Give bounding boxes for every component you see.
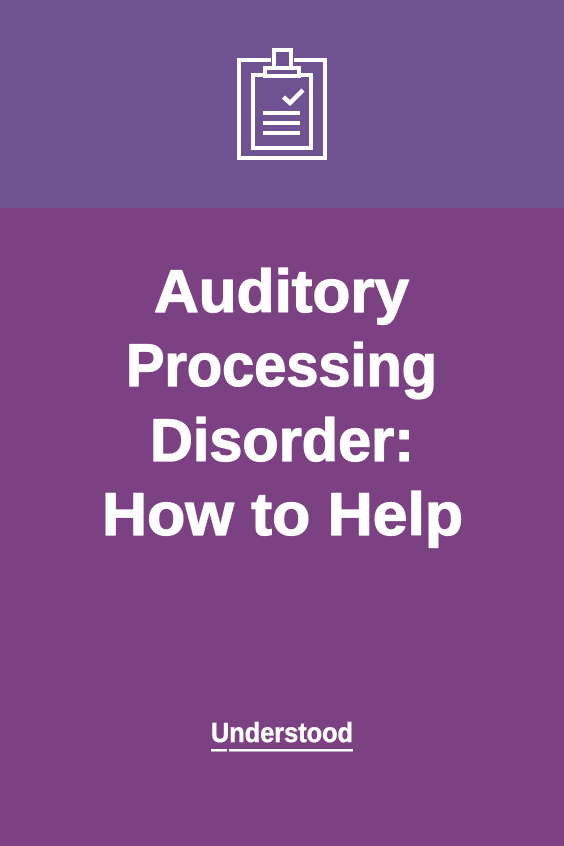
title [102,258,463,548]
icon: clipboard with checklist [239,50,325,158]
logo: Understood wordmark: Understood [211,717,353,748]
panel: main plum background [0,208,564,846]
title: Disorder: [150,407,414,474]
title: How to Help [102,481,463,548]
title: Auditory [154,258,410,325]
panel: top purple band [0,0,564,208]
title: Processing [126,332,437,399]
